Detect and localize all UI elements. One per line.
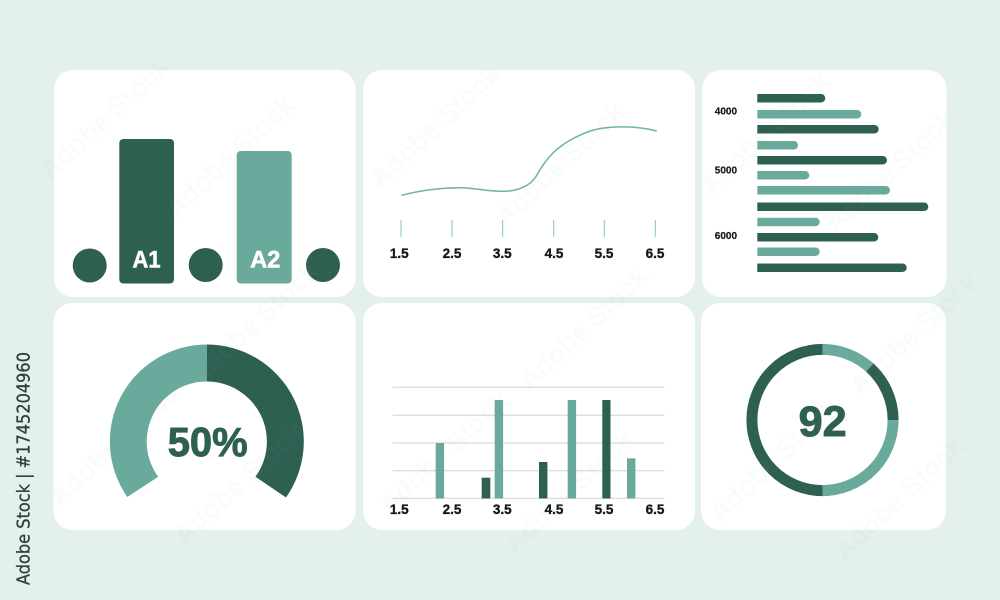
x axis labels: 6.5 bbox=[646, 502, 665, 517]
x axis labels: 3.5 bbox=[493, 502, 512, 517]
x axis labels: 5.5 bbox=[595, 246, 614, 261]
x axis labels bbox=[390, 246, 665, 261]
x axis labels: 1.5 bbox=[390, 502, 409, 517]
grid lines bbox=[393, 387, 664, 498]
gauge: light half bbox=[110, 344, 207, 497]
panel: horizontal bar chart bbox=[702, 70, 946, 297]
x axis labels: 5.5 bbox=[595, 502, 614, 517]
watermark pattern: Adobe Stock bbox=[183, 256, 325, 391]
panel: bar chart A1 and A2 bbox=[54, 70, 356, 297]
x axis labels: 6.5 bbox=[646, 246, 665, 261]
x axis labels: 1.5 bbox=[390, 246, 409, 261]
watermark pattern: Adobe Stock bbox=[364, 59, 506, 194]
label: A2: A2 bbox=[250, 247, 280, 274]
dot: right bbox=[306, 248, 340, 282]
y axis labels: 5000 bbox=[715, 166, 737, 177]
watermark pattern: Adobe Stock bbox=[843, 266, 985, 401]
watermark pattern: Adobe Stock bbox=[498, 424, 640, 559]
watermark pattern: Adobe Stock bbox=[34, 51, 176, 186]
watermark pattern: Adobe Stock bbox=[694, 66, 836, 201]
stock id side text: Adobe Stock | #1745204960 bbox=[14, 352, 34, 585]
x axis labels: 4.5 bbox=[545, 502, 564, 517]
x axis labels: 3.5 bbox=[493, 246, 512, 261]
watermark pattern: Adobe Stock bbox=[43, 378, 185, 513]
watermark pattern: Adobe Stock bbox=[819, 104, 961, 239]
watermark pattern: Adobe Stock bbox=[159, 89, 301, 224]
dot: left bbox=[73, 248, 107, 282]
x axis ticks bbox=[401, 220, 655, 237]
watermark pattern: Adobe Stock bbox=[513, 261, 655, 396]
horizontal bars bbox=[757, 94, 928, 272]
line curve bbox=[401, 127, 657, 195]
y axis labels bbox=[715, 107, 737, 242]
watermark pattern: Adobe Stock bbox=[828, 431, 970, 566]
ring value: 92 bbox=[799, 398, 847, 446]
x axis labels: 2.5 bbox=[443, 502, 462, 517]
bar: A1 bbox=[119, 139, 174, 284]
panel: vertical bar chart bbox=[363, 303, 695, 530]
gauge: dark half bbox=[207, 344, 304, 498]
x axis labels: 2.5 bbox=[443, 246, 462, 261]
panel: gauge 50% bbox=[54, 303, 356, 530]
dot: middle bbox=[189, 248, 223, 282]
panel: ring chart 92 bbox=[701, 303, 946, 530]
watermark pattern: Adobe Stock bbox=[703, 393, 845, 528]
bar: A2 bbox=[237, 151, 292, 284]
x axis labels: 4.5 bbox=[545, 246, 564, 261]
vertical bars bbox=[436, 400, 635, 498]
y axis labels: 4000 bbox=[715, 107, 737, 118]
gauge value: 50% bbox=[168, 419, 248, 465]
y axis labels: 6000 bbox=[715, 231, 737, 242]
panel: line chart bbox=[363, 70, 695, 297]
label: A1: A1 bbox=[132, 247, 160, 274]
watermark pattern: Adobe Stock bbox=[373, 386, 515, 521]
watermark pattern: Adobe Stock bbox=[489, 97, 631, 232]
x axis labels bbox=[390, 502, 665, 517]
watermark pattern: Adobe Stock bbox=[168, 416, 310, 551]
ring segments bbox=[752, 349, 893, 491]
